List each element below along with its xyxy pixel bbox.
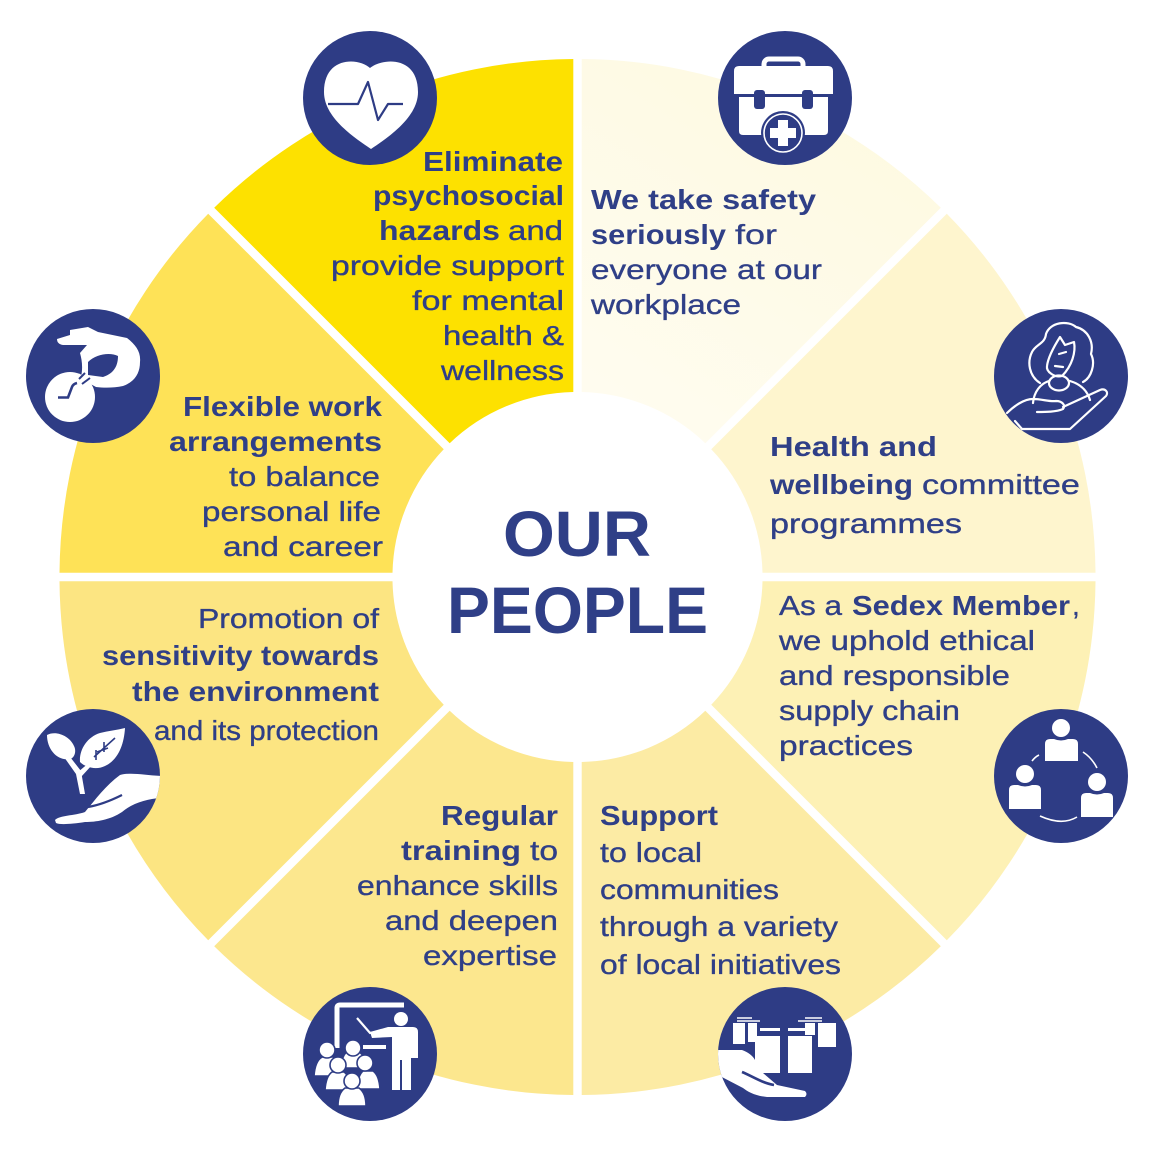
text: Sedex: As a [779, 590, 842, 621]
text: health committee: wellbeing [769, 469, 913, 500]
wedge: environment [60, 581, 444, 940]
text: psychosocial hazards: provide support [331, 250, 564, 281]
text: local communities: through a variety [600, 911, 838, 942]
text: local communities: of local initiatives [600, 949, 841, 980]
text: training [357, 800, 558, 971]
text: health committee: programmes [770, 508, 962, 539]
text: psychosocial hazards: health & [443, 320, 564, 351]
text: safety [590, 184, 822, 320]
text: Sedex: , [1072, 590, 1080, 621]
panel: psychosocial hazards [214, 31, 573, 443]
text: Sedex: and responsible [779, 660, 1010, 691]
panel: training [214, 711, 573, 1121]
text: flexible work [169, 391, 383, 562]
icon: time and life balance [26, 309, 160, 443]
text: environment: and its protection [154, 715, 379, 746]
text: Sedex [778, 590, 1080, 761]
text: training: to [530, 835, 558, 866]
wedge: Sedex [711, 581, 1096, 940]
text: flexible work: and career [223, 531, 383, 562]
text: safety: seriously [591, 219, 726, 250]
text: environment: sensitivity towards [102, 640, 379, 671]
center title: PEOPLE [447, 573, 708, 647]
panel: local communities [582, 711, 941, 1121]
text: psychosocial hazards: Eliminate [423, 146, 563, 177]
center title: OUR [503, 498, 651, 570]
text: flexible work: arrangements [169, 426, 382, 457]
icon: team circle [994, 709, 1128, 843]
text: training: enhance skills [357, 870, 558, 901]
text: Sedex: Sedex Member [852, 590, 1070, 621]
text: local communities: Support [600, 800, 718, 831]
icon: hand holding goods [716, 987, 852, 1121]
icon: first aid kit [718, 31, 852, 165]
text: Sedex: supply chain [779, 695, 960, 726]
text: training: Regular [441, 800, 558, 831]
text: safety: everyone at our [591, 254, 822, 285]
text: flexible work: to balance [229, 461, 380, 492]
wedge: local communities [582, 711, 941, 1095]
panel: health committee [711, 214, 1128, 573]
text: safety: for [735, 219, 777, 250]
icon: teacher and students [303, 987, 437, 1121]
text: environment: Promotion of [198, 603, 379, 634]
text: psychosocial hazards: psychosocial [373, 180, 564, 211]
text: psychosocial hazards: for mental [412, 285, 564, 316]
text: psychosocial hazards: hazards [379, 215, 500, 246]
text: health committee: Health and [770, 431, 937, 462]
text: psychosocial hazards: wellness [440, 355, 564, 386]
wedge: flexible work [60, 214, 444, 573]
panel: safety [582, 31, 941, 443]
text: safety: workplace [590, 289, 741, 320]
text: psychosocial hazards: and [508, 215, 563, 246]
text: training: training [401, 835, 521, 866]
text: safety: We take safety [591, 184, 816, 215]
text: environment: the environment [132, 676, 379, 707]
text: local communities: communities [600, 874, 779, 905]
icon: plant in hand [26, 709, 161, 843]
panel: environment [26, 581, 444, 940]
text: Sedex: we uphold ethical [778, 625, 1035, 656]
text: local communities: to local [600, 837, 702, 868]
icon: woman in hand [994, 309, 1128, 443]
panel: Sedex [711, 581, 1128, 940]
panel: flexible work [26, 214, 444, 573]
text: Sedex: practices [779, 730, 913, 761]
wedge: safety [582, 59, 941, 443]
text: flexible work: Flexible work [183, 391, 382, 422]
text: training: and deepen [385, 905, 558, 936]
text: health committee [769, 431, 1080, 539]
text: environment [102, 603, 379, 746]
icon: heart with pulse [303, 31, 437, 165]
text: training: expertise [423, 940, 557, 971]
text: flexible work: personal life [202, 496, 381, 527]
text: health committee: committee [922, 469, 1080, 500]
center title [447, 498, 708, 647]
text: psychosocial hazards [331, 146, 564, 386]
wedge: psychosocial hazards [214, 59, 573, 443]
wedge: training [214, 711, 573, 1095]
text: local communities [600, 800, 841, 980]
wedge: health committee [711, 214, 1096, 573]
